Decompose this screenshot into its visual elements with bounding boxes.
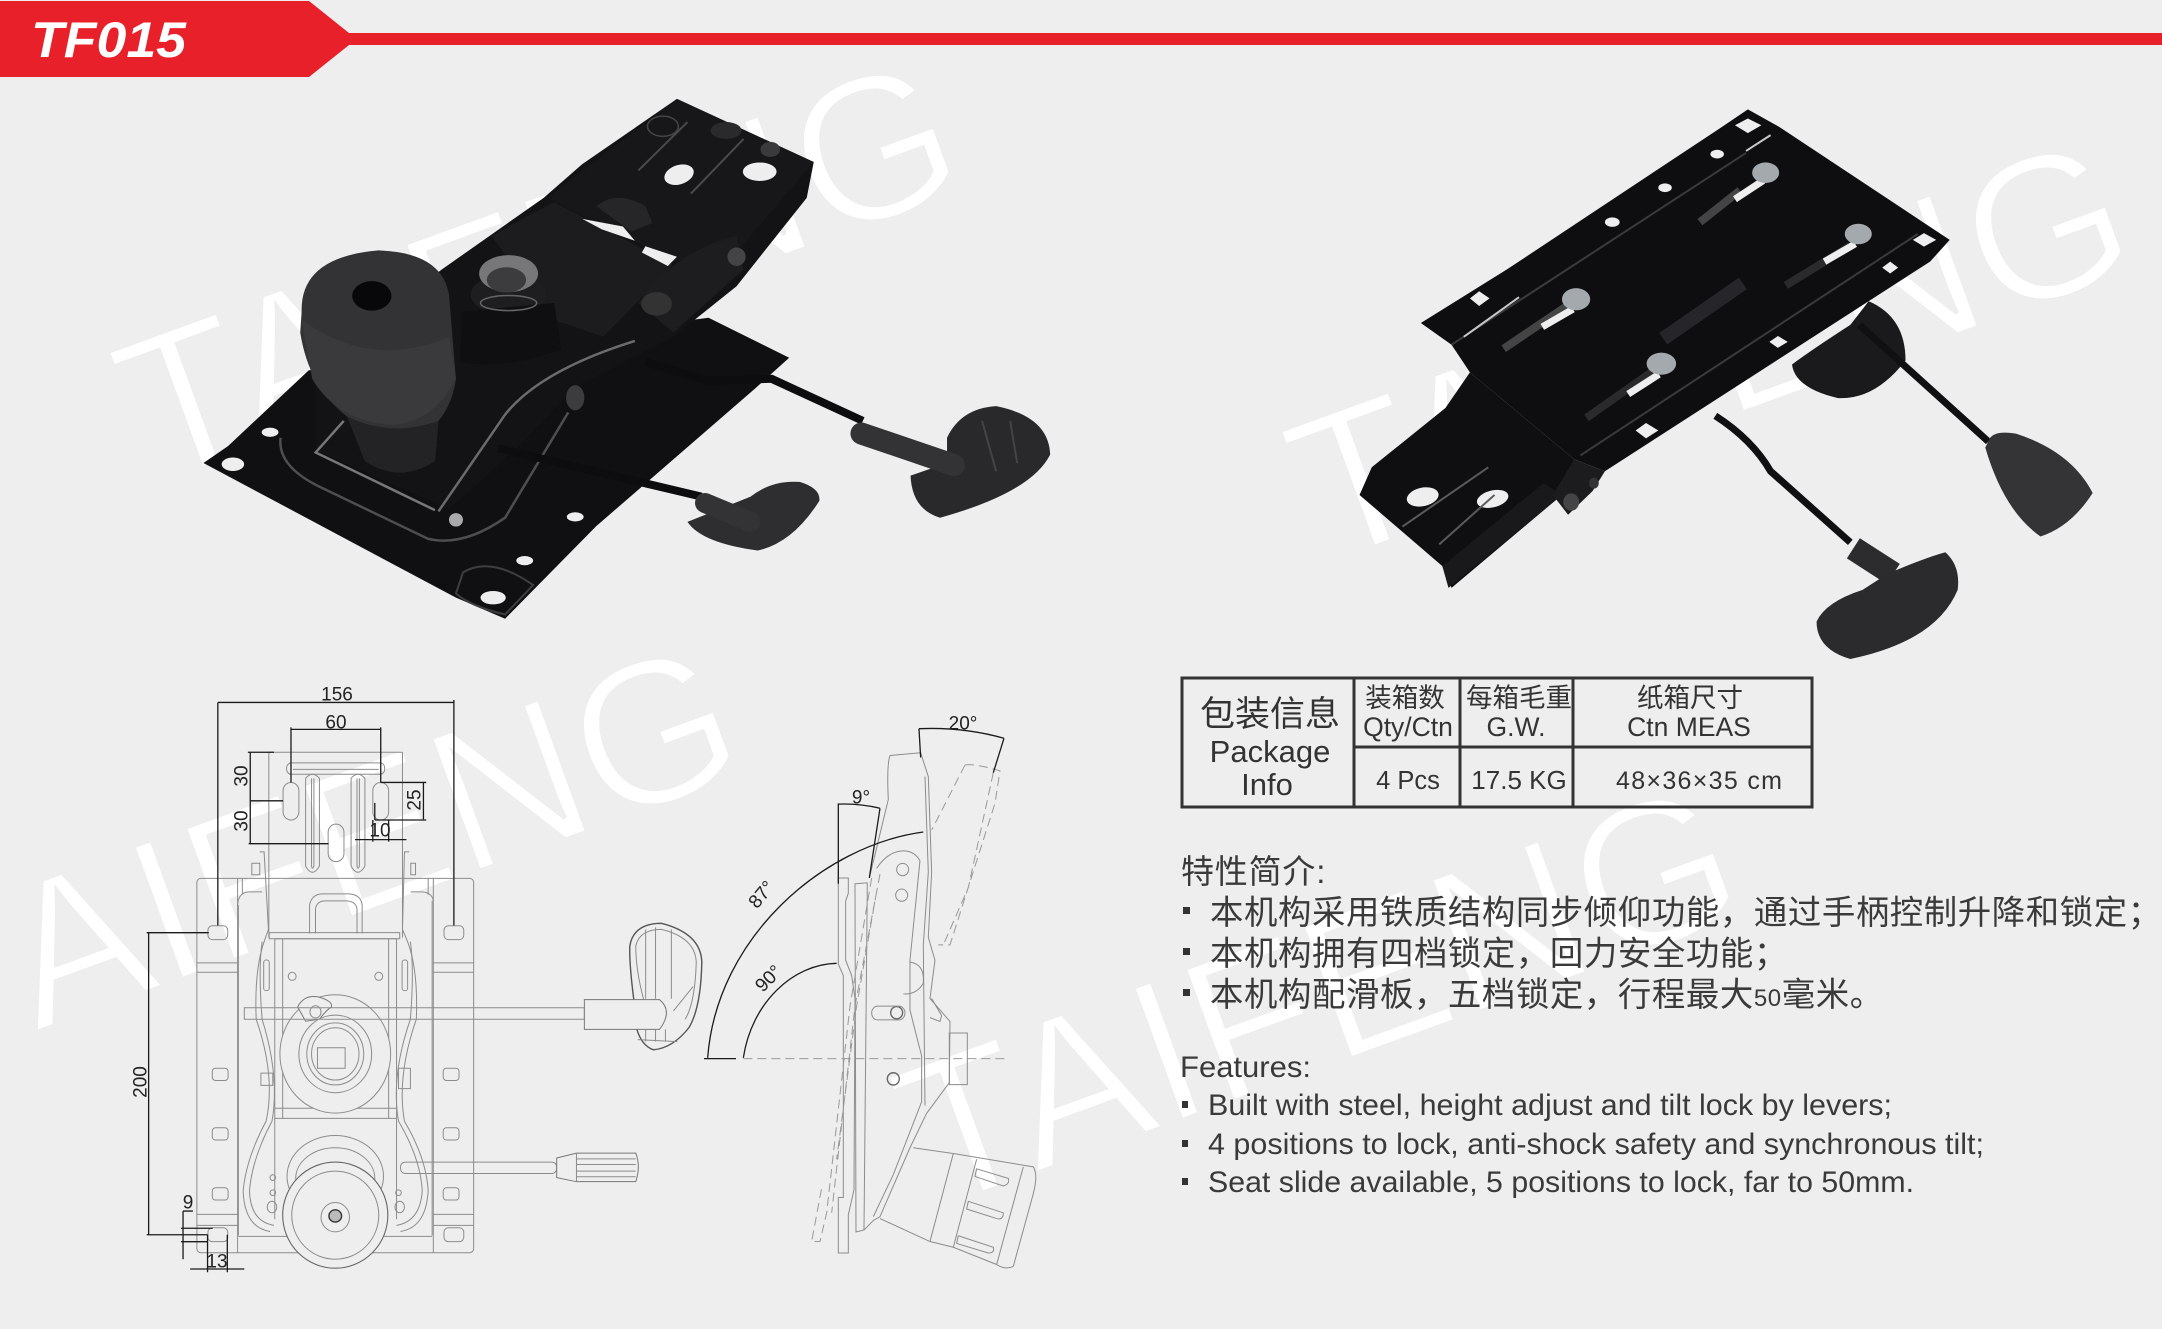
technical drawing: side view with tilt angles bbox=[704, 728, 1036, 1268]
package info table: 包装信息 bbox=[1200, 695, 1340, 734]
side view angle labels: 87° bbox=[745, 877, 779, 913]
dimension lines bbox=[147, 700, 454, 1272]
package info table: Package bbox=[1210, 734, 1330, 769]
front view dimension labels: 60 bbox=[325, 712, 347, 734]
front view dimension labels: 200 bbox=[130, 1066, 152, 1098]
recline lever bbox=[401, 1153, 638, 1182]
front view dimension labels: 25 bbox=[404, 789, 426, 811]
watermark: centre: TAIFENG bbox=[869, 739, 1768, 1252]
package info table: 17.5 KG bbox=[1471, 765, 1567, 795]
watermark: top left: TAIFENG bbox=[89, 14, 988, 527]
front view dimension labels: 30 bbox=[232, 810, 252, 832]
package info table: 48×36×35 cm bbox=[1616, 767, 1782, 795]
angle dimensions bbox=[704, 728, 1004, 1059]
package info table: 装箱数 bbox=[1365, 683, 1445, 713]
English feature list: Features: bbox=[1180, 1051, 1311, 1084]
package info table: Qty/Ctn bbox=[1363, 712, 1453, 742]
English feature list bbox=[1180, 1051, 1984, 1199]
side view angle labels: 9° bbox=[852, 788, 870, 808]
side view angle labels: 90° bbox=[751, 961, 787, 997]
side view angle labels: 20° bbox=[949, 714, 977, 734]
bullet 1: Built with steel, height adjust and tilt lock by levers; bbox=[1208, 1089, 1892, 1122]
Chinese feature list bbox=[1181, 853, 2162, 1014]
package info table bbox=[1182, 678, 1812, 807]
package info table: 纸箱尺寸 bbox=[1637, 683, 1743, 713]
knob outline bbox=[880, 1148, 1036, 1268]
front view dimension labels: 10 bbox=[369, 820, 391, 842]
side view angle labels bbox=[745, 714, 977, 997]
package info table: 4 Pcs bbox=[1376, 767, 1440, 795]
package info table: G.W. bbox=[1487, 712, 1545, 742]
header banner with model number bbox=[0, 1, 2162, 77]
front view dimension labels: 9 bbox=[183, 1192, 193, 1214]
header banner with model number: TF015 bbox=[31, 12, 187, 68]
front view dimension labels: 30 bbox=[232, 765, 252, 787]
Chinese feature list: 特性简介: bbox=[1181, 853, 1326, 890]
front view dimension labels: 13 bbox=[206, 1252, 228, 1272]
base plate outline bbox=[197, 878, 474, 1253]
bullet 2: 本机构拥有四档锁定，回力安全功能； bbox=[1210, 936, 1788, 973]
side arms and frame bbox=[238, 852, 433, 1236]
technical drawing: front view with dimensions bbox=[147, 700, 702, 1272]
product photo: mechanism, top-side view with levers bbox=[203, 99, 1050, 619]
central housing bbox=[269, 894, 400, 1219]
bullet 3: 本机构配滑板，五档锁定，行程最大50毫米。 bbox=[1210, 977, 1884, 1014]
tilted position (dashed) bbox=[743, 765, 1008, 1242]
bullet 1: 本机构采用铁质结构同步倾仰功能，通过手柄控制升降和锁定； bbox=[1210, 895, 2162, 932]
package info table: Info bbox=[1241, 767, 1293, 802]
slide plate outline bbox=[269, 752, 402, 938]
package info table: 每箱毛重 bbox=[1466, 683, 1572, 713]
front view dimension labels: 156 bbox=[321, 684, 353, 706]
product photo: mechanism, underside view with slide plate bbox=[1360, 109, 2093, 659]
package info table: Ctn MEAS bbox=[1627, 712, 1751, 742]
tension knob bbox=[267, 1136, 404, 1268]
bullet 3: Seat slide available, 5 positions to lock, far to 50mm. bbox=[1208, 1166, 1914, 1199]
bullet 2: 4 positions to lock, anti-shock safety and synchronous tilt; bbox=[1208, 1128, 1984, 1161]
seat plate and body outline bbox=[838, 753, 967, 1253]
height lever bbox=[244, 923, 702, 1050]
front view dimension labels bbox=[130, 684, 426, 1272]
watermark: right: TAIFENG bbox=[1261, 93, 2160, 606]
